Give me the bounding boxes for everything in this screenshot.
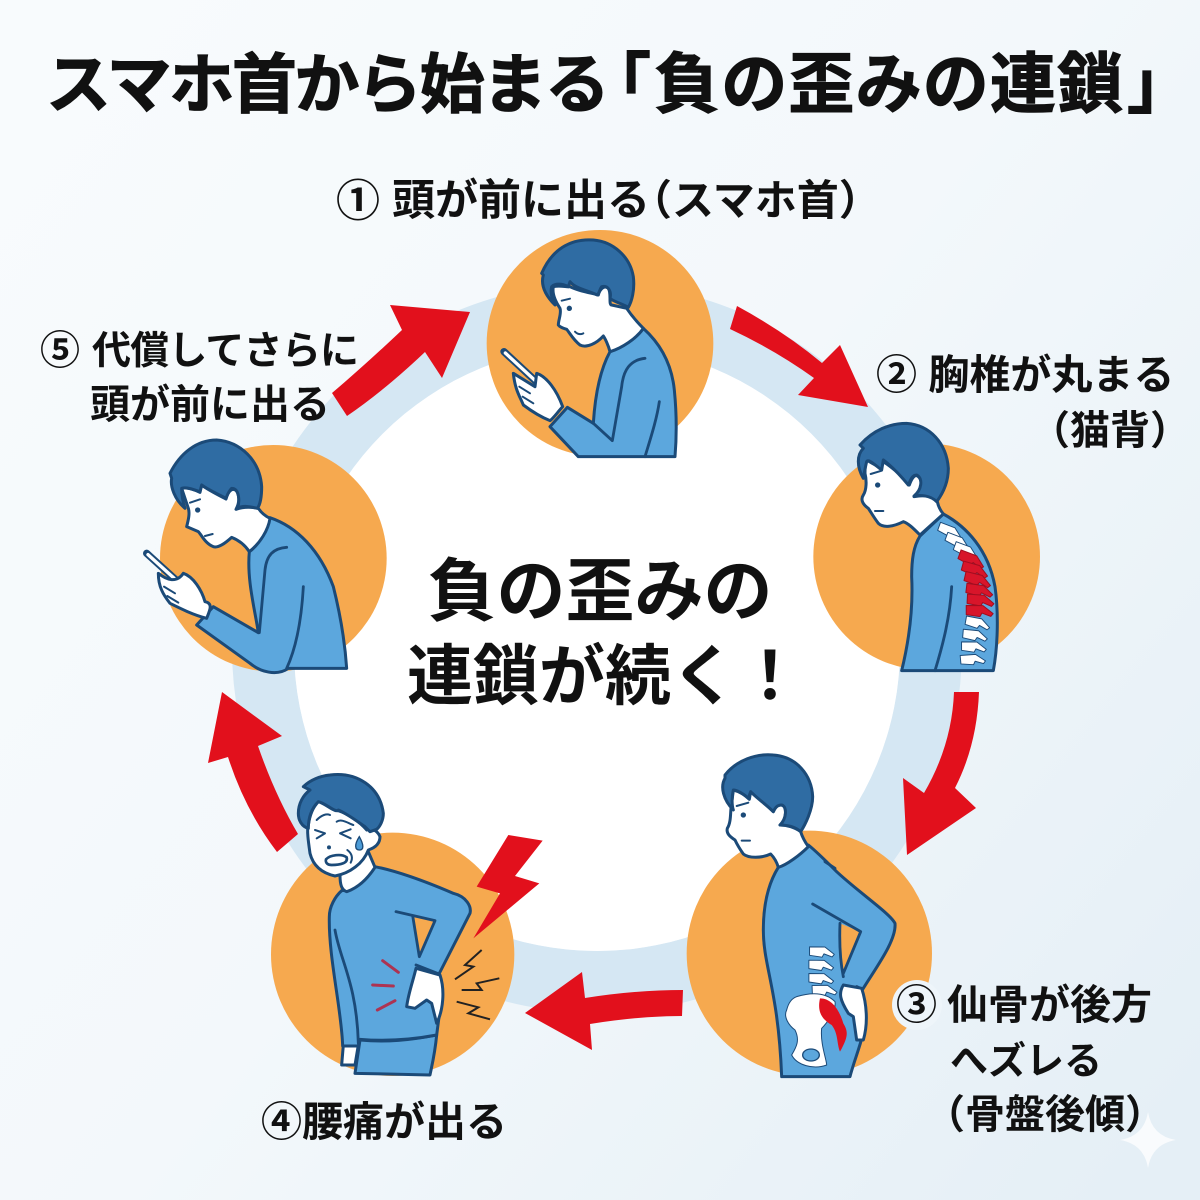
cycle ring — [232, 283, 962, 1013]
label 1: （スマホ首） — [630, 177, 881, 224]
pelvis — [786, 994, 835, 1067]
label 5 — [40, 329, 358, 427]
illustration 3 — [687, 755, 932, 1077]
label 5: 頭が前に出る — [90, 383, 330, 427]
label 5: ⑤ — [40, 329, 80, 373]
step 2: thoracic kyphosis — [813, 352, 1190, 671]
title — [46, 47, 1193, 121]
label 5: 代償してさらに — [92, 330, 358, 373]
illustration 4 — [271, 775, 543, 1076]
label 2: （猫背） — [1030, 409, 1190, 453]
label 3 — [892, 980, 1165, 1137]
label 3: へズレる — [950, 1040, 1102, 1083]
title: 」 — [1127, 47, 1193, 121]
label 1: 頭が前に出る — [392, 177, 650, 225]
label 4: ④腰痛が出る — [261, 1099, 507, 1145]
title: 負の歪みの連鎖 — [654, 47, 1124, 121]
title: 「 — [585, 47, 651, 121]
centre message: 負の歪みの — [428, 553, 772, 630]
step 3: pelvis tilt — [687, 755, 1165, 1137]
illustration 5 — [147, 440, 387, 673]
label 3: 仙骨が後方 — [947, 982, 1152, 1028]
inner white disc — [294, 345, 900, 951]
centre message — [407, 553, 803, 713]
watermark sparkle — [1120, 1112, 1176, 1168]
arrow 4 to 5 — [208, 692, 298, 852]
sacrum — [819, 998, 847, 1052]
label 1 — [336, 177, 881, 226]
label 2 — [876, 352, 1190, 453]
label 3: （骨盤後傾） — [925, 1093, 1165, 1137]
arrow 1 to 2 — [730, 306, 868, 407]
label 2: ② 胸椎が丸まる — [876, 352, 1174, 398]
arrow 5 to 1 — [332, 305, 470, 416]
step 4: low back pain — [261, 775, 543, 1145]
illustration 1 — [487, 230, 713, 457]
arrow 2 to 3 — [903, 692, 979, 855]
spine — [937, 521, 995, 665]
label 3: ③ — [896, 982, 937, 1028]
step 5: compensation — [40, 329, 387, 673]
zigzag pain — [455, 950, 499, 1019]
lightning bolt — [473, 835, 543, 938]
centre message: 連鎖が続く！ — [407, 639, 803, 713]
title: スマホ首から始まる — [46, 48, 607, 121]
illustration 2 — [813, 423, 1040, 671]
lumbar vertebrae — [808, 946, 837, 996]
step 1: head forward — [336, 177, 881, 457]
pain marks — [373, 961, 398, 1010]
arrow 3 to 4 — [525, 972, 683, 1050]
label 1: ① — [336, 177, 380, 226]
